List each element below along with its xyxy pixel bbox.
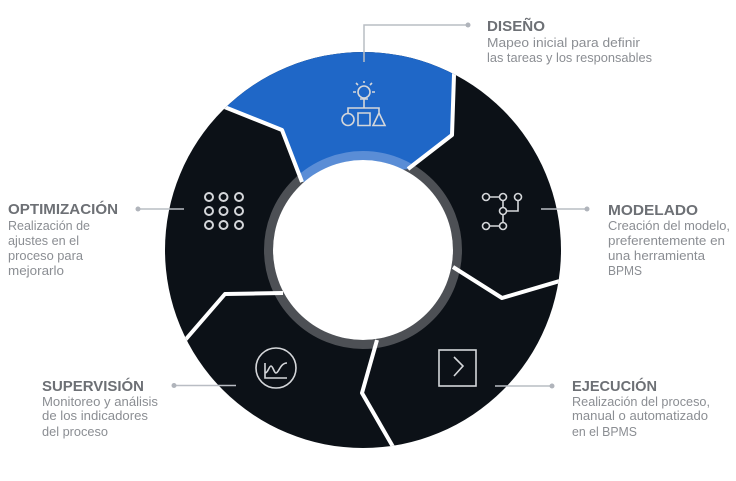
text: supervisión: del proceso (42, 425, 108, 439)
text: modelado: BPMS (608, 264, 642, 278)
text: optimización: proceso para (8, 249, 83, 263)
text: supervisión (42, 377, 158, 439)
text: modelado: una herramienta (608, 249, 705, 263)
leader: modelado (541, 206, 590, 212)
text: ejecución: en el BPMS (572, 425, 637, 439)
inner gray ring (268, 156, 458, 344)
icon: process nodes (482, 194, 522, 230)
donut cycle diagram (165, 52, 561, 448)
icon: dot grid (205, 193, 243, 229)
text: modelado: preferentemente en (608, 234, 725, 248)
blue segment inner highlight (300, 151, 412, 182)
leader: optimización (136, 206, 184, 212)
black ring base (165, 52, 561, 448)
text: supervisión: de los indicadores (42, 409, 148, 423)
text: supervisión: Monitoreo y análisis (42, 395, 158, 409)
text: modelado (608, 202, 730, 278)
text: ejecución (572, 377, 710, 439)
center hole (273, 160, 453, 340)
icon: chevron square (439, 350, 476, 386)
text: ejecución: EJECUCIÓN (572, 377, 657, 395)
text: optimización (8, 200, 118, 278)
text: diseño: las tareas y los responsables (487, 51, 652, 65)
text: optimización: Realización de (8, 219, 90, 233)
text: diseño: DISEÑO (487, 17, 545, 35)
text: modelado: MODELADO (608, 202, 698, 219)
leader: ejecución (495, 384, 554, 388)
text: diseño (487, 17, 652, 65)
segment: diseño blue (226, 52, 454, 182)
text: optimización: OPTIMIZACIÓN (8, 200, 118, 218)
icon: bulb with shapes (342, 81, 385, 126)
text: ejecución: manual o automatizado (572, 409, 708, 423)
text: ejecución: Realización del proceso, (572, 395, 710, 409)
text: optimización: ajustes en el (8, 234, 79, 248)
text: optimización: mejorarlo (8, 264, 64, 278)
text: modelado: Creación del modelo, (608, 219, 730, 233)
leader: diseño (364, 22, 470, 62)
text: supervisión: SUPERVISIÓN (42, 377, 144, 395)
leader: supervisión (172, 383, 236, 388)
text: diseño: Mapeo inicial para definir (487, 36, 640, 50)
segment separators (185, 73, 559, 446)
icon: chart circle (256, 348, 296, 388)
